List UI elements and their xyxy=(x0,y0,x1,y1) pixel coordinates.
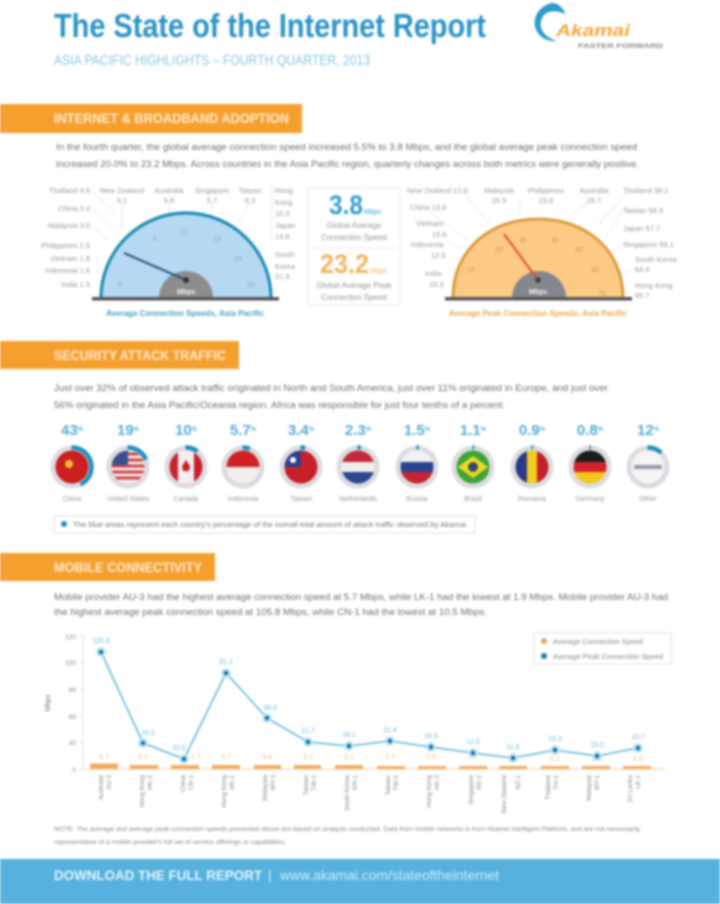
country: Other: % xyxy=(654,427,660,433)
text block: mobile intro xyxy=(54,592,668,617)
chart: average peak connection speed gauge: Average Peak Connection Speeds, Asia Pacific xyxy=(449,309,628,318)
chart: average connection speed gauge: 6 xyxy=(153,236,157,243)
chart: average peak connection speed gauge: New Zealand 21.6 xyxy=(407,186,468,195)
average connection speed values: 3.1 xyxy=(344,754,354,761)
y axis: 40 xyxy=(69,740,76,747)
provider labels: New Zealand xyxy=(501,775,508,813)
text block: adoption intro: increased 20.0% to 23.2 Mbps. Across countries in the Asia Pacific region, quarterly changes across both metrics were generally positive. xyxy=(56,159,639,169)
stat: global average peak connection speed: 23.2 xyxy=(320,249,369,279)
chart: average peak connection speed gauge: 12.5 xyxy=(431,251,446,260)
country: Germany: 0.8 xyxy=(577,422,598,439)
stat: global average peak connection speed: Mbps xyxy=(370,268,388,275)
country: Russia: Russia xyxy=(406,496,428,503)
country: Germany xyxy=(568,422,612,503)
panel: global speed stats xyxy=(308,188,400,305)
chart: average connection speed gauge: 21.9 xyxy=(275,272,290,281)
text block: note: representative of a mobile provider's full set of service offerings or capabilities. xyxy=(54,839,286,846)
country: Netherlands: % xyxy=(366,427,372,433)
country: Indonesia: Indonesia xyxy=(228,496,258,503)
country: Other: 12 xyxy=(637,422,654,439)
chart: average peak connection speed gauge: Philippines xyxy=(528,186,564,195)
footer: download banner xyxy=(0,859,720,904)
y axis: 80 xyxy=(69,687,76,694)
peak connection speed values: 91.2 xyxy=(219,659,233,666)
chart: average connection speed gauge: India 1.5 xyxy=(61,280,90,289)
peak connection speed values: 15.7 xyxy=(631,734,645,741)
average connection speed values: 3.7 xyxy=(221,754,231,761)
chart: average peak connection speed gauge: 50 xyxy=(575,247,583,254)
country: Taiwan: % xyxy=(309,427,315,433)
chart: average connection speed gauge: 5.1 xyxy=(117,196,127,205)
logo: Akamai: Akamai xyxy=(555,21,632,40)
provider labels: Taiwan xyxy=(303,775,310,795)
chart: average peak connection speed gauge: 26.7 xyxy=(587,196,601,205)
text block: security intro: 56% originated in the Asia Pacific/Oceania region. Africa was responsible for just four tenths of a percent. xyxy=(54,400,505,410)
chart: average connection speed gauge: 12 xyxy=(180,229,188,236)
provider labels: MY-1 xyxy=(594,775,601,790)
legend: chart series xyxy=(534,633,671,664)
peak connection speed markers xyxy=(98,648,642,762)
chart: average peak connection speed gauge: Hong Kong xyxy=(635,281,673,290)
country: Netherlands xyxy=(336,422,380,503)
chart: average peak connection speed gauge xyxy=(407,186,678,318)
country: China: 43 xyxy=(61,422,78,439)
provider labels: HK-3 xyxy=(434,775,441,790)
chart: average peak connection speed gauge: Singapore 59.1 xyxy=(623,240,674,249)
country: Romania: 0.9 xyxy=(519,422,540,439)
average connection speed values: 5.7 xyxy=(99,754,109,761)
chart: average peak connection speed gauge: Mbps xyxy=(529,289,547,296)
gauge hub xyxy=(159,271,213,298)
provider labels: HK-1 xyxy=(229,775,236,790)
y axis: 100 xyxy=(65,660,76,667)
chart: average peak connection speed gauge: 10.3 xyxy=(429,280,444,289)
stat: global average connection speed: Connection Speed xyxy=(321,233,387,242)
chart: average connection speed gauge: China 3.4 xyxy=(58,204,90,213)
chart: average connection speed gauge: Philippines 2.5 xyxy=(41,241,90,250)
peak connection speed values: 15.3 xyxy=(548,736,562,743)
chart: average peak connection speed gauge: 20 xyxy=(495,247,503,254)
country: Brazil: Brazil xyxy=(464,496,482,503)
provider labels: Australia xyxy=(98,775,105,800)
provider labels: KR-1 xyxy=(352,775,359,790)
peak connection speed values: 38.3 xyxy=(263,705,277,712)
provider labels: Hong Kong xyxy=(221,775,228,808)
stat: global average peak connection speed: Connection Speed xyxy=(321,293,387,302)
legend: chart series: Average Peak Connection Speed xyxy=(553,652,663,661)
provider labels: Taiwan xyxy=(385,775,392,795)
chart: average peak connection speed gauge: China 13.8 xyxy=(410,203,446,212)
peak connection speed values xyxy=(92,638,645,752)
provider labels: South Korea xyxy=(344,775,351,811)
provider labels: LK-1 xyxy=(635,775,642,789)
y axis: Mbps xyxy=(45,694,52,712)
average connection speed values: 2.1 xyxy=(550,756,560,763)
country: Russia: % xyxy=(425,427,431,433)
provider labels: Singapore xyxy=(468,775,475,805)
y axis xyxy=(45,634,83,774)
chart: average peak connection speed gauge: Vietnam xyxy=(416,219,443,228)
provider labels: HK-2 xyxy=(147,775,154,790)
provider labels: MY-3 xyxy=(270,775,277,790)
y axis: 60 xyxy=(69,714,76,721)
chart: average peak connection speed gauge: 70 xyxy=(598,291,606,298)
country: United States: 19 xyxy=(117,422,134,439)
country: Romania: % xyxy=(540,427,546,433)
average connection speed values: 2.7 xyxy=(468,754,478,761)
legend: flag ring note xyxy=(54,516,475,533)
chart: average peak connection speed gauge: Japan 57.7 xyxy=(623,224,660,233)
country: China: % xyxy=(78,427,84,433)
peak connection speed values: 20.0 xyxy=(141,730,155,737)
chart: average peak connection speed gauge: Thailand 38.1 xyxy=(623,186,668,195)
chart: average connection speed gauge: 24 xyxy=(234,256,242,263)
chart: average connection speed gauge: 8.3 xyxy=(245,196,255,205)
text block: note: NOTE: The average and average peak connection speeds presented above are based on analysis conducted. Data from mobile networks is from Akamai Intelligent Platform, and are not necessarily xyxy=(54,826,641,833)
stat: global average peak connection speed xyxy=(316,249,393,302)
peak connection speed values: 10.5 xyxy=(172,745,186,752)
average connection speed values: 2.5 xyxy=(633,756,643,763)
legend: flag ring note: The blue areas represent each country's percentage of the overall total amount of attack traffic observed by Akamai. xyxy=(73,520,468,529)
chart: average connection speed gauge: Korea xyxy=(275,262,296,271)
country: Canada xyxy=(164,422,208,503)
footer: download banner: www.akamai.com/stateoftheinternet xyxy=(279,867,499,883)
chart: average connection speed gauge: New Zealand xyxy=(100,186,144,195)
subtitle: ASIA PACIFIC HIGHLIGHTS – FOURTH QUARTER, 2013 xyxy=(54,53,370,69)
country: United States: United States xyxy=(107,496,150,503)
chart: average peak connection speed gauge: Malaysia xyxy=(484,186,515,195)
chart: average connection speed gauge: 13.8 xyxy=(275,232,290,241)
average connection speed values: 3.1 xyxy=(138,754,148,761)
text block: mobile intro: the highest average peak connection speed at 105.8 Mbps, while CN-1 had the lowest at 10.5 Mbps. xyxy=(54,607,487,617)
country: Brazil xyxy=(452,422,494,503)
country: Other xyxy=(626,422,670,503)
provider labels: Thailand xyxy=(545,775,552,800)
peak connection speed values: 13.2 xyxy=(590,742,604,749)
provider labels xyxy=(98,775,642,813)
average connection speed values xyxy=(99,754,643,763)
chart: average peak connection speed gauge: 40 xyxy=(551,237,559,244)
text block: mobile intro: Mobile provider AU-3 had the highest average connection speed at 5.7 Mbps, while LK-1 had the lowest at 1.9 Mbps. Mobile provider AU-3 had xyxy=(54,592,668,602)
chart: average connection speed gauge: Malaysia 3.0 xyxy=(48,221,90,230)
footer: download banner: DOWNLOAD THE FULL REPORT xyxy=(54,867,262,883)
average connection speed values: 1.7 xyxy=(191,754,201,761)
section heading: security attack traffic: SECURITY ATTACK TRAFFIC xyxy=(54,348,226,363)
peak connection speed values: 18.1 xyxy=(342,732,356,739)
country: China xyxy=(50,422,94,503)
chart: average peak connection speed gauge: 15.6 xyxy=(432,230,447,239)
section heading: mobile connectivity: MOBILE CONNECTIVITY xyxy=(54,560,202,575)
provider labels: Hong Kong xyxy=(426,775,433,808)
section heading: security attack traffic xyxy=(0,341,239,369)
chart: average connection speed gauge: Japan xyxy=(275,221,295,230)
chart: average peak connection speed gauge: 60 xyxy=(591,267,599,274)
logo: Akamai: FASTER FORWARD xyxy=(578,44,664,50)
peak connection speed values: 11.6 xyxy=(506,744,520,751)
chart: average connection speed gauge xyxy=(41,185,296,318)
chart: average connection speed gauge: Kong xyxy=(275,198,293,207)
logo: Akamai xyxy=(535,3,664,50)
country: Netherlands: 2.3 xyxy=(345,422,366,439)
text block: adoption intro xyxy=(56,142,639,169)
section heading: internet and broadband adoption: INTERNET & BROADBAND ADOPTION xyxy=(54,111,289,126)
chart: average peak connection speed gauge: South Korea xyxy=(635,255,678,264)
country: Russia xyxy=(396,422,438,503)
provider labels: TW-1 xyxy=(311,775,318,791)
peak connection speed values: 105.8 xyxy=(92,638,110,645)
country: Taiwan xyxy=(280,422,322,503)
stat: global average connection speed: Mbps xyxy=(364,209,382,216)
stat: global average connection speed: Global Average xyxy=(327,221,382,230)
chart: average connection speed gauge: Mbps xyxy=(177,289,195,296)
country: Brazil: 1.1 xyxy=(460,422,481,439)
title: The State of the Internet Report xyxy=(54,7,486,44)
country: Germany: % xyxy=(598,427,604,433)
text block: note xyxy=(54,826,641,846)
country: China: China xyxy=(63,496,81,503)
chart: average connection speed gauge: South xyxy=(275,250,295,259)
y axis: 0 xyxy=(72,767,76,774)
country: Canada: 10 xyxy=(175,422,192,439)
provider labels: Malaysia xyxy=(586,775,593,801)
text block: security intro: Just over 32% of observed attack traffic originated in North and South America, just over 11% originated in Europe, and just over xyxy=(54,383,608,393)
y axis: 120 xyxy=(65,634,76,641)
country: Canada: Canada xyxy=(174,496,198,503)
country: Taiwan: Taiwan xyxy=(290,496,312,503)
peak connection speed line xyxy=(101,652,638,759)
country: Indonesia xyxy=(222,422,264,503)
country: Other: Other xyxy=(639,496,657,503)
country: Indonesia: 5.7 xyxy=(230,422,251,439)
average connection speed values: 2.7 xyxy=(385,754,395,761)
country: Romania xyxy=(510,422,554,503)
provider labels: CN-1 xyxy=(188,775,195,790)
chart: average connection speed gauge: Vietnam 1.8 xyxy=(50,254,90,263)
provider labels: AU-3 xyxy=(106,775,113,790)
chart: average peak connection speed gauge: 64.4 xyxy=(635,265,650,274)
chart: average peak connection speed gauge: 23.8 xyxy=(539,196,553,205)
country: Brazil: % xyxy=(481,427,487,433)
average connection speed values: 2.1 xyxy=(592,756,602,763)
gauge needle xyxy=(124,253,189,283)
country: United States: % xyxy=(134,427,140,433)
text block: security intro xyxy=(54,383,608,410)
footer: download banner: | xyxy=(268,867,272,883)
peak connection speed values: 21.7 xyxy=(301,728,315,735)
chart: average peak connection speed gauge: Australia xyxy=(579,186,609,195)
chart: mobile connection speeds xyxy=(45,634,665,813)
chart: average connection speed gauge: 5.8 xyxy=(164,196,174,205)
gauge needle xyxy=(504,234,541,283)
chart: average peak connection speed gauge: India xyxy=(425,269,442,278)
chart: average connection speed gauge: Australia xyxy=(154,186,184,195)
chart: average peak connection speed gauge: 30 xyxy=(519,237,527,244)
stat: global average connection speed xyxy=(321,190,387,242)
peak connection speed values: 16.9 xyxy=(424,733,438,740)
provider labels: Hong Kong xyxy=(139,775,146,808)
provider labels: Sri Lanka xyxy=(627,775,634,802)
text block: adoption intro: In the fourth quarter, the global average connection speed increased 5.5% to 3.8 Mbps, and the global average peak connection speed xyxy=(56,142,637,152)
country: United States xyxy=(106,422,150,503)
provider labels: China xyxy=(180,775,187,792)
chart: average connection speed gauge: Indonesia 1.6 xyxy=(45,266,90,275)
chart: average peak connection speed gauge: 26.5 xyxy=(492,196,506,205)
gauge hub xyxy=(512,271,566,298)
section heading: mobile connectivity xyxy=(0,553,215,581)
chart: average peak connection speed gauge: 10 xyxy=(467,267,475,274)
chart: average connection speed gauge: 30 xyxy=(247,282,255,289)
chart: average connection speed gauge: Thailand 4.6 xyxy=(49,186,90,195)
chart: average connection speed gauge: 10.3 xyxy=(275,209,290,218)
average connection speed bars xyxy=(83,764,665,769)
country: Canada: % xyxy=(192,427,198,433)
country: Taiwan: 3.4 xyxy=(288,422,309,439)
country: Netherlands: Netherlands xyxy=(339,496,377,503)
chart: average connection speed gauge: Hong xyxy=(275,186,293,195)
average connection speed values: 1.9 xyxy=(508,756,518,763)
chart: average connection speed gauge: Average Connection Speeds, Asia Pacific xyxy=(106,309,265,318)
provider labels: SG-2 xyxy=(476,775,483,790)
average connection speed values: 2.9 xyxy=(426,754,436,761)
provider labels: NZ-1 xyxy=(515,775,522,789)
country: Indonesia: % xyxy=(251,427,257,433)
stat: global average peak connection speed: Global Average Peak xyxy=(316,281,393,290)
peak connection speed values: 12.5 xyxy=(466,739,480,746)
country: Germany: Germany xyxy=(576,496,605,503)
chart: average connection speed gauge: Taiwan xyxy=(238,186,262,195)
provider labels: TH-1 xyxy=(553,775,560,789)
chart: average connection speed gauge: Singapore xyxy=(195,186,229,195)
chart: average connection speed gauge: 5.7 xyxy=(207,196,217,205)
stat: global average connection speed: 3.8 xyxy=(329,190,363,220)
chart: average connection speed gauge: 0 xyxy=(118,282,122,289)
average connection speed values: 3.1 xyxy=(303,754,313,761)
chart: average peak connection speed gauge: Taiwan 58.9 xyxy=(623,206,663,215)
peak connection speed values: 21.4 xyxy=(383,727,397,734)
provider labels: Malaysia xyxy=(262,775,269,801)
average connection speed values: 3.4 xyxy=(262,754,272,761)
provider labels: TW-2 xyxy=(393,775,400,791)
chart: average peak connection speed gauge: Indonesia xyxy=(411,240,444,249)
section heading: internet and broadband adoption xyxy=(0,104,302,133)
country: Romania: Romania xyxy=(518,496,546,503)
chart: average peak connection speed gauge: 65.7 xyxy=(635,291,650,300)
chart: average connection speed gauge: 18 xyxy=(213,236,221,243)
country: Russia: 1.5 xyxy=(404,422,425,439)
legend: chart series: Average Connection Speed xyxy=(553,637,643,646)
